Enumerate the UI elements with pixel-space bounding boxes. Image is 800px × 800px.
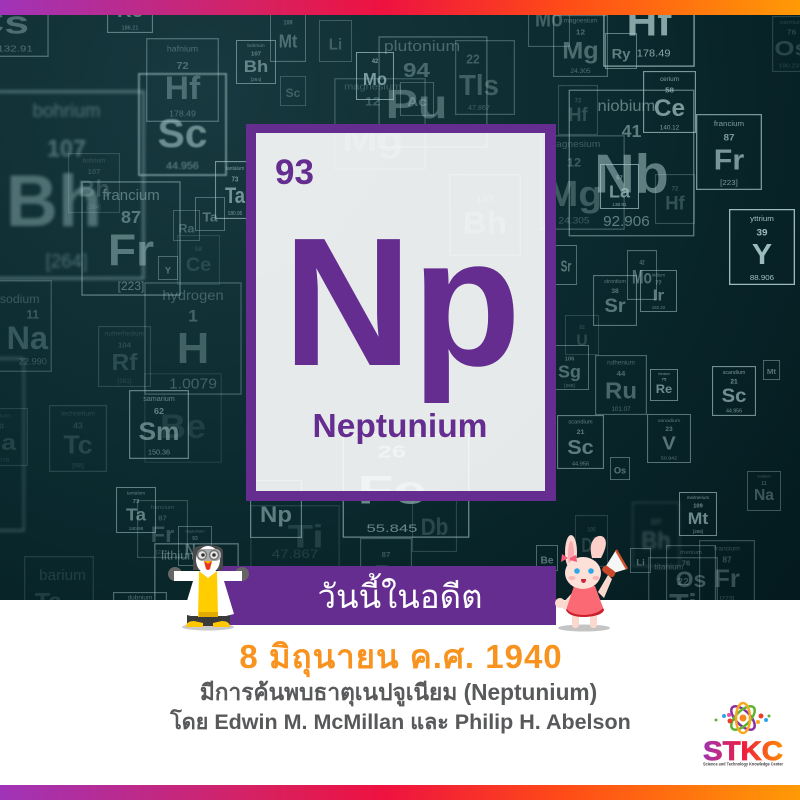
tile: Tc: [98] <box>72 463 84 469</box>
tile: hafnium: hafnium <box>167 43 198 53</box>
banner text: วันนี้ในอดีต <box>318 578 482 615</box>
tile: Sc lower: Sc <box>567 437 594 459</box>
tile: Sc right: 44.956 <box>726 409 742 415</box>
tile: lithium <box>154 543 239 600</box>
tile: Bh in card: Bh <box>463 205 507 240</box>
tile: Sc right: 21 <box>730 379 738 385</box>
tile: Fe: 26 <box>378 442 406 461</box>
tile: Ta small: Ta <box>202 210 218 225</box>
tile: Ru: Ru <box>605 378 637 403</box>
tile: Fe: 55.845 <box>367 522 417 535</box>
tile: hydrogen: H <box>177 325 209 373</box>
tile: Sc right <box>712 366 756 416</box>
element symbol: Np <box>283 199 521 404</box>
tile: U: 92 <box>579 325 585 331</box>
tile: magnesium top <box>334 78 426 159</box>
tile: Ac top: Ac <box>407 95 427 110</box>
tile: Fr lower: francium <box>151 505 174 511</box>
tile: Rf <box>98 326 151 387</box>
tile: Bh large blurred: bohrium <box>32 101 101 122</box>
tile: Bh small top: Bh <box>244 57 268 76</box>
tile: Mo right: Mo <box>632 266 652 288</box>
tile: Sg: Sg <box>558 362 581 382</box>
tile: Tc: technetium <box>61 411 95 418</box>
tile: Bh small top <box>236 40 276 84</box>
mascot: penguin scientist <box>165 540 255 635</box>
tile: Rf: Rf <box>112 350 137 376</box>
tile: Li lower: Li <box>636 558 645 569</box>
tile: barium <box>24 556 94 615</box>
tile: hydrogen <box>144 282 242 395</box>
tile: Na left: Na <box>7 320 49 356</box>
tile: hafnium: Hf <box>165 70 201 106</box>
tile: Hf mid right <box>655 174 695 224</box>
tile: magnesium right: 24.305 <box>558 216 590 227</box>
mascot: pink bunny with megaphone <box>552 530 637 635</box>
tile: Ta top: 180.95 <box>228 211 242 217</box>
tile: Mg top right: Mg <box>562 38 599 64</box>
description line 1: มีการค้นพบธาตุเนปจูเนียม (Neptunium) <box>200 679 597 705</box>
tile: Re top <box>107 0 153 33</box>
tile: Y: Y <box>752 239 772 271</box>
tile: Rf: nutherfordium <box>105 331 144 338</box>
tile: La: La <box>609 182 630 202</box>
tile: Sg: [266] <box>564 383 575 388</box>
tile: Ti lower right: Ti <box>669 588 697 622</box>
tile: hydrogen: hydrogen <box>162 288 224 304</box>
tile: Bh small top: bohrium <box>247 43 265 48</box>
tile: plutonium: Pu <box>386 81 447 127</box>
tile: dubnium <box>113 592 167 601</box>
tile: Fr lower right: Fr <box>714 565 740 593</box>
tile: Bh in card: 107 <box>476 194 494 206</box>
tile: Tc: 43 <box>73 421 83 430</box>
tile: Ir: 77 <box>655 281 662 287</box>
tile: Mt top: Mt <box>279 30 298 52</box>
tile: lithium: lithium <box>161 549 198 562</box>
tile: Sm: Sm <box>138 418 180 446</box>
tile: V: 23 <box>665 426 673 433</box>
tile: plutonium <box>378 36 488 127</box>
tile: Ti lower center <box>251 506 339 589</box>
tile: Sr upper: Sr <box>604 295 626 317</box>
tile: V: 50.942 <box>661 456 677 462</box>
tile: hydrogen: 1 <box>188 306 198 325</box>
tile: Rf: [261] <box>117 378 132 385</box>
atomic number: 93 <box>275 153 314 192</box>
tile: Ru: 101.07 <box>611 406 631 413</box>
tile: neptunium small: Np <box>185 542 205 559</box>
tile: magnesium right <box>546 135 625 230</box>
tile: Sc small top <box>280 76 306 106</box>
tile: Fr lower right: 87 <box>722 556 732 565</box>
tile: Ti lower right: titanium <box>654 563 684 572</box>
tile: Mo top right: Mo <box>535 4 563 32</box>
tile: Be lower <box>536 545 558 571</box>
tile: Re top: Re <box>117 0 143 22</box>
tile: Ry small <box>605 33 637 69</box>
tile: titanium top: 47.867 <box>468 103 490 112</box>
tile: Fr right: 87 <box>723 133 735 144</box>
tile: Fr right: [223] <box>720 178 738 187</box>
tile: Hf top right <box>603 0 695 67</box>
tile: Y <box>730 210 794 284</box>
tile: Na right <box>747 471 781 511</box>
tile: plutonium: plutonium <box>384 38 460 55</box>
tile: Db lower: Db <box>581 534 602 556</box>
tile: hafnium: 178.49 <box>169 109 196 118</box>
tile: Li top <box>319 20 352 62</box>
tile: Sc lower: 21 <box>577 429 585 436</box>
tile: Mg top right: 12 <box>576 28 586 37</box>
tile: Fr lower right: francium <box>714 545 740 552</box>
tile: Li top: Li <box>329 36 342 54</box>
tile: Mt: Mt <box>688 508 708 528</box>
tile: Re right: 75 <box>662 377 667 382</box>
tile: La <box>600 164 639 209</box>
tile: Mo top: Mo <box>363 68 387 89</box>
tile: magnesium right: magnesium <box>548 139 600 150</box>
tile: Sm: 62 <box>154 406 164 416</box>
element name: Neptunium <box>313 408 487 445</box>
tile: Hf mid right: 72 <box>672 186 679 193</box>
tile: neptunium small: 93 <box>192 536 198 542</box>
tile: Hf right: 72 <box>575 97 582 105</box>
tile: Db lower center <box>412 491 457 551</box>
tile: hafnium: 72 <box>176 60 189 72</box>
tile: Ta top <box>215 161 246 219</box>
tile: Mg top right: 24.305 <box>570 68 591 75</box>
tile: Db lower: 105 <box>587 527 596 534</box>
tile: Mt: [268] <box>693 529 703 534</box>
tile: Bh large blurred <box>0 92 143 278</box>
tile: Y: yttrium <box>750 214 774 223</box>
tile: Fr lower center: 87 <box>382 550 390 559</box>
tile: Ce faint <box>177 235 220 285</box>
tile: Ac top <box>400 82 434 116</box>
tile: Hf top right: 178.49 <box>637 48 670 59</box>
tile: Os small: Os <box>614 465 626 475</box>
date heading: 8 มิถุนายน ค.ศ. 1940 <box>239 638 563 675</box>
bottom gradient bar <box>0 785 800 800</box>
tile: Tc <box>49 405 107 472</box>
tile: Sm: samarium <box>143 396 175 403</box>
tile: Ta lower: tantalum <box>127 490 145 495</box>
tile: Fr left: Fr <box>108 225 154 275</box>
tile: Ir: iridium <box>652 273 665 278</box>
tile: Mo top <box>356 52 394 100</box>
tile: barium: barium <box>39 567 86 584</box>
tile: Bh small left: bohrium <box>83 158 105 164</box>
tile: Ru <box>596 356 646 414</box>
tile: Fr lower: 87 <box>158 513 167 522</box>
tile: Mt right small: Mt <box>767 367 776 376</box>
tile: V <box>647 414 691 463</box>
tile: neptunium small: neptunium <box>185 528 205 533</box>
tile: Mo right <box>627 250 657 300</box>
tile: Ru: ruthenium <box>607 360 635 366</box>
tile: Cs <box>0 5 49 57</box>
tile: Sr upper: strontium <box>604 279 626 285</box>
tile: Os lower right: 76 <box>682 558 690 567</box>
tile: Bh blurred lower: 107 <box>650 517 662 527</box>
tile: Ti lower center: 47.867 <box>272 548 318 561</box>
tile: Fr lower <box>137 500 188 558</box>
tile: Ce faint: Ce <box>186 255 211 276</box>
tile: Ti lower center: Ti <box>288 518 324 554</box>
tile: hydrogen: 1.0079 <box>169 376 217 392</box>
tile: Ta top: tantalum <box>226 166 245 172</box>
tile: Be faint <box>144 373 222 463</box>
tile: Mt <box>679 492 717 536</box>
tile: Bh small left: 107 <box>88 167 100 176</box>
tile: Hf right <box>558 85 598 135</box>
tile: Re right: rhenium <box>658 372 670 376</box>
logo: STKC <box>695 698 795 770</box>
tile: magnesium right: Mg <box>546 174 602 215</box>
tile: Bh small left <box>68 153 120 213</box>
tile: Hf mid right: Hf <box>665 192 685 213</box>
tile: Os lower right: Os <box>676 567 706 592</box>
tile: Ce right: cerium <box>660 76 679 83</box>
tile: Mg top right: magnesium <box>563 18 598 25</box>
tile: Be lower: Be <box>541 555 554 566</box>
tile: Na right: sodium <box>757 473 771 478</box>
tile: Sc lower <box>557 415 604 469</box>
tile: titanium top: Tls <box>459 68 499 101</box>
tile: Os top right <box>772 16 800 72</box>
tile: Fr left: 87 <box>121 208 141 227</box>
tile: titanium top: 22 <box>466 53 480 67</box>
tile: Ta lower: Ta <box>126 505 147 524</box>
banner: today in the past <box>218 566 556 625</box>
tile: Nb: Nb <box>594 143 669 204</box>
tile: La: 57 <box>616 176 623 182</box>
tile: Y small: Y <box>165 265 171 275</box>
tile: V: V <box>662 433 676 454</box>
white lower panel <box>0 600 800 785</box>
tile: Mt top <box>270 15 306 62</box>
tile: Fr lower right: [223] <box>720 596 735 603</box>
tile: Ta top: 73 <box>232 176 239 183</box>
tile: Sc small top: Sc <box>286 87 301 100</box>
tile: Sc blurred <box>139 74 226 175</box>
tile: Sg: 106 <box>565 357 574 363</box>
tile: Fr left: [223] <box>118 280 144 293</box>
tile: Hf top right: Hf <box>627 0 672 44</box>
tile: Ce faint: 58 <box>195 246 203 253</box>
tile: Sc blurred: Sc <box>157 111 208 156</box>
tile: Bh blurred lower <box>632 503 680 566</box>
tile: U: U <box>576 333 588 350</box>
tile: blurred frame left <box>0 358 24 531</box>
tile: Ti lower right: 22 <box>677 577 689 588</box>
tile: Fr right: francium <box>714 119 744 128</box>
tile: Ra small: Ra <box>179 222 195 235</box>
tile: Na right: 11 <box>761 481 767 487</box>
tile: Bh small top: [264] <box>251 77 261 82</box>
tile: Nb: 41 <box>622 121 642 141</box>
tile: Re right: Re <box>656 382 672 396</box>
tile: Sr left: Sr <box>561 258 571 275</box>
tile: Nb <box>568 90 694 236</box>
tile: Db lower <box>575 515 608 567</box>
tile: Sm <box>129 390 189 459</box>
tile: Ta top: Ta <box>225 185 246 208</box>
tile: Bh blurred lower: Bh <box>641 527 671 554</box>
tile: Fr left <box>81 181 181 296</box>
tile: Na left: 22.990 <box>19 356 47 366</box>
tile: Ru: 44 <box>617 369 626 378</box>
tile: Y small <box>158 256 178 280</box>
tile: Re right <box>650 369 678 401</box>
tile: barium: Ta <box>35 589 63 615</box>
tile: Fr lower center: Fr <box>374 561 398 586</box>
tile: V: vanadium <box>658 418 680 424</box>
tile: Ra small <box>173 210 200 241</box>
tile: Fr right: Fr <box>714 144 745 177</box>
tile: Ta lower <box>116 487 156 533</box>
tile: Ta lower: 73 <box>133 499 140 505</box>
tile: Nb: niobium <box>598 97 655 115</box>
tile: Ce right: 140.12 <box>660 124 680 131</box>
tile: Np below card <box>251 480 301 538</box>
top gradient bar <box>0 0 800 15</box>
tile: Sc lower: 44.956 <box>572 461 589 467</box>
tile: Mg top right <box>553 15 608 77</box>
tile: Hf right: Hf <box>568 104 588 125</box>
tile: plutonium: 94 <box>403 59 431 82</box>
tile: hafnium <box>146 38 219 122</box>
tile: Ir: 192.22 <box>652 305 666 310</box>
tile: Sg <box>550 345 589 390</box>
tile: Bh small left: [264] <box>87 204 101 211</box>
logo: STKC: Science and Technology Knowledge Center <box>703 762 783 766</box>
description line 2: โดย Edwin M. McMillan และ Philip H. Abelson <box>170 710 631 734</box>
tile: Fe: Fe <box>358 467 426 512</box>
tile: Bh large blurred: 107 <box>47 136 86 163</box>
tile: Li lower <box>630 548 651 573</box>
tile: Mo right: 42 <box>639 260 645 267</box>
tile: Fr lower center <box>361 538 411 598</box>
tile: Sc lower: scandium <box>568 420 593 426</box>
tile: Ir: Ir <box>653 286 665 304</box>
tile: Y: 88.906 <box>750 273 774 282</box>
tile: Os top right: 190.23 <box>779 63 800 69</box>
tile: Mt: 109 <box>693 503 703 509</box>
tile: Sr upper: 38 <box>611 288 619 295</box>
tile: Os lower right <box>666 545 716 603</box>
tile: Bh large blurred: Bh <box>6 161 102 242</box>
tile: Bh large blurred: [264] <box>46 251 87 272</box>
tile: Ta lower: 180.95 <box>129 526 144 531</box>
tile: Ce right: Ce <box>654 95 685 122</box>
tile: Sc blurred: 44.956 <box>166 161 199 172</box>
tile: Fr left: francium <box>102 188 160 204</box>
tile: Bh in card <box>450 175 520 255</box>
tile: Ti lower right <box>649 558 717 636</box>
tile: U <box>565 315 599 355</box>
tile: Rf: 104 <box>118 340 132 349</box>
tile: Sm: 150.36 <box>148 450 170 456</box>
tile: Fr lower right <box>700 541 754 604</box>
tile: Ce right: 58 <box>665 86 675 95</box>
tile: Mt top: 109 <box>283 20 293 27</box>
tile: Os small <box>610 457 630 480</box>
tile: Be faint: Be <box>160 408 206 446</box>
tile: Ta small <box>195 197 225 231</box>
tile: Db lower center: Db <box>421 514 448 540</box>
tile: Fe <box>343 435 469 537</box>
tile: Na left: 11 <box>26 307 39 321</box>
tile: Ir <box>640 270 677 312</box>
tile: Ce right <box>643 71 696 133</box>
tile: Mo top: 42 <box>372 59 379 65</box>
tile: Nb: 92.906 <box>603 213 650 230</box>
tile: magnesium top: magnesium <box>344 82 401 92</box>
logo: STKC: STKC <box>703 736 783 766</box>
tile: Sc right: Sc <box>722 386 746 407</box>
tile: Tc: Tc <box>63 430 93 459</box>
tile: La: 138.91 <box>612 202 627 207</box>
tile: dubnium: dubnium <box>128 595 152 601</box>
tile: Sr left <box>555 245 577 285</box>
tile: Na left <box>0 280 52 372</box>
tile: Na left: sodium <box>0 292 39 306</box>
element card: Neptunium <box>246 124 556 501</box>
tile: Y: 39 <box>756 228 768 239</box>
tile: Sr upper <box>593 275 637 326</box>
tile: Ca <box>0 408 28 466</box>
tile: Mt right small <box>763 360 780 380</box>
tile: Fr right <box>697 115 761 189</box>
tile: titanium top <box>455 40 515 115</box>
tile: Np below card: Np <box>260 502 292 527</box>
tile: Fr lower: [223] <box>156 550 170 556</box>
tile: Os lower right: rhenium <box>680 550 702 556</box>
tile: Fr lower: Fr <box>151 522 174 547</box>
tile: magnesium right: 12 <box>567 156 581 170</box>
tile: Mo top right <box>528 4 570 47</box>
tile: Bh small left: Bh <box>78 176 110 201</box>
tile: magnesium top: 12 <box>365 96 380 108</box>
tile: Re top: 186.21 <box>122 26 138 31</box>
tile: neptunium small <box>178 526 212 566</box>
tile: Ry small: Ry <box>612 47 630 62</box>
tile: Na right: Na <box>754 487 774 504</box>
tile: Bh small top: 107 <box>251 52 261 57</box>
tile: Mt: meitnerium <box>687 495 710 500</box>
tile: magnesium top: Mg <box>342 120 403 159</box>
tile: Os top right: 76 <box>787 28 797 36</box>
tile: Sc right: scandium <box>723 370 745 376</box>
